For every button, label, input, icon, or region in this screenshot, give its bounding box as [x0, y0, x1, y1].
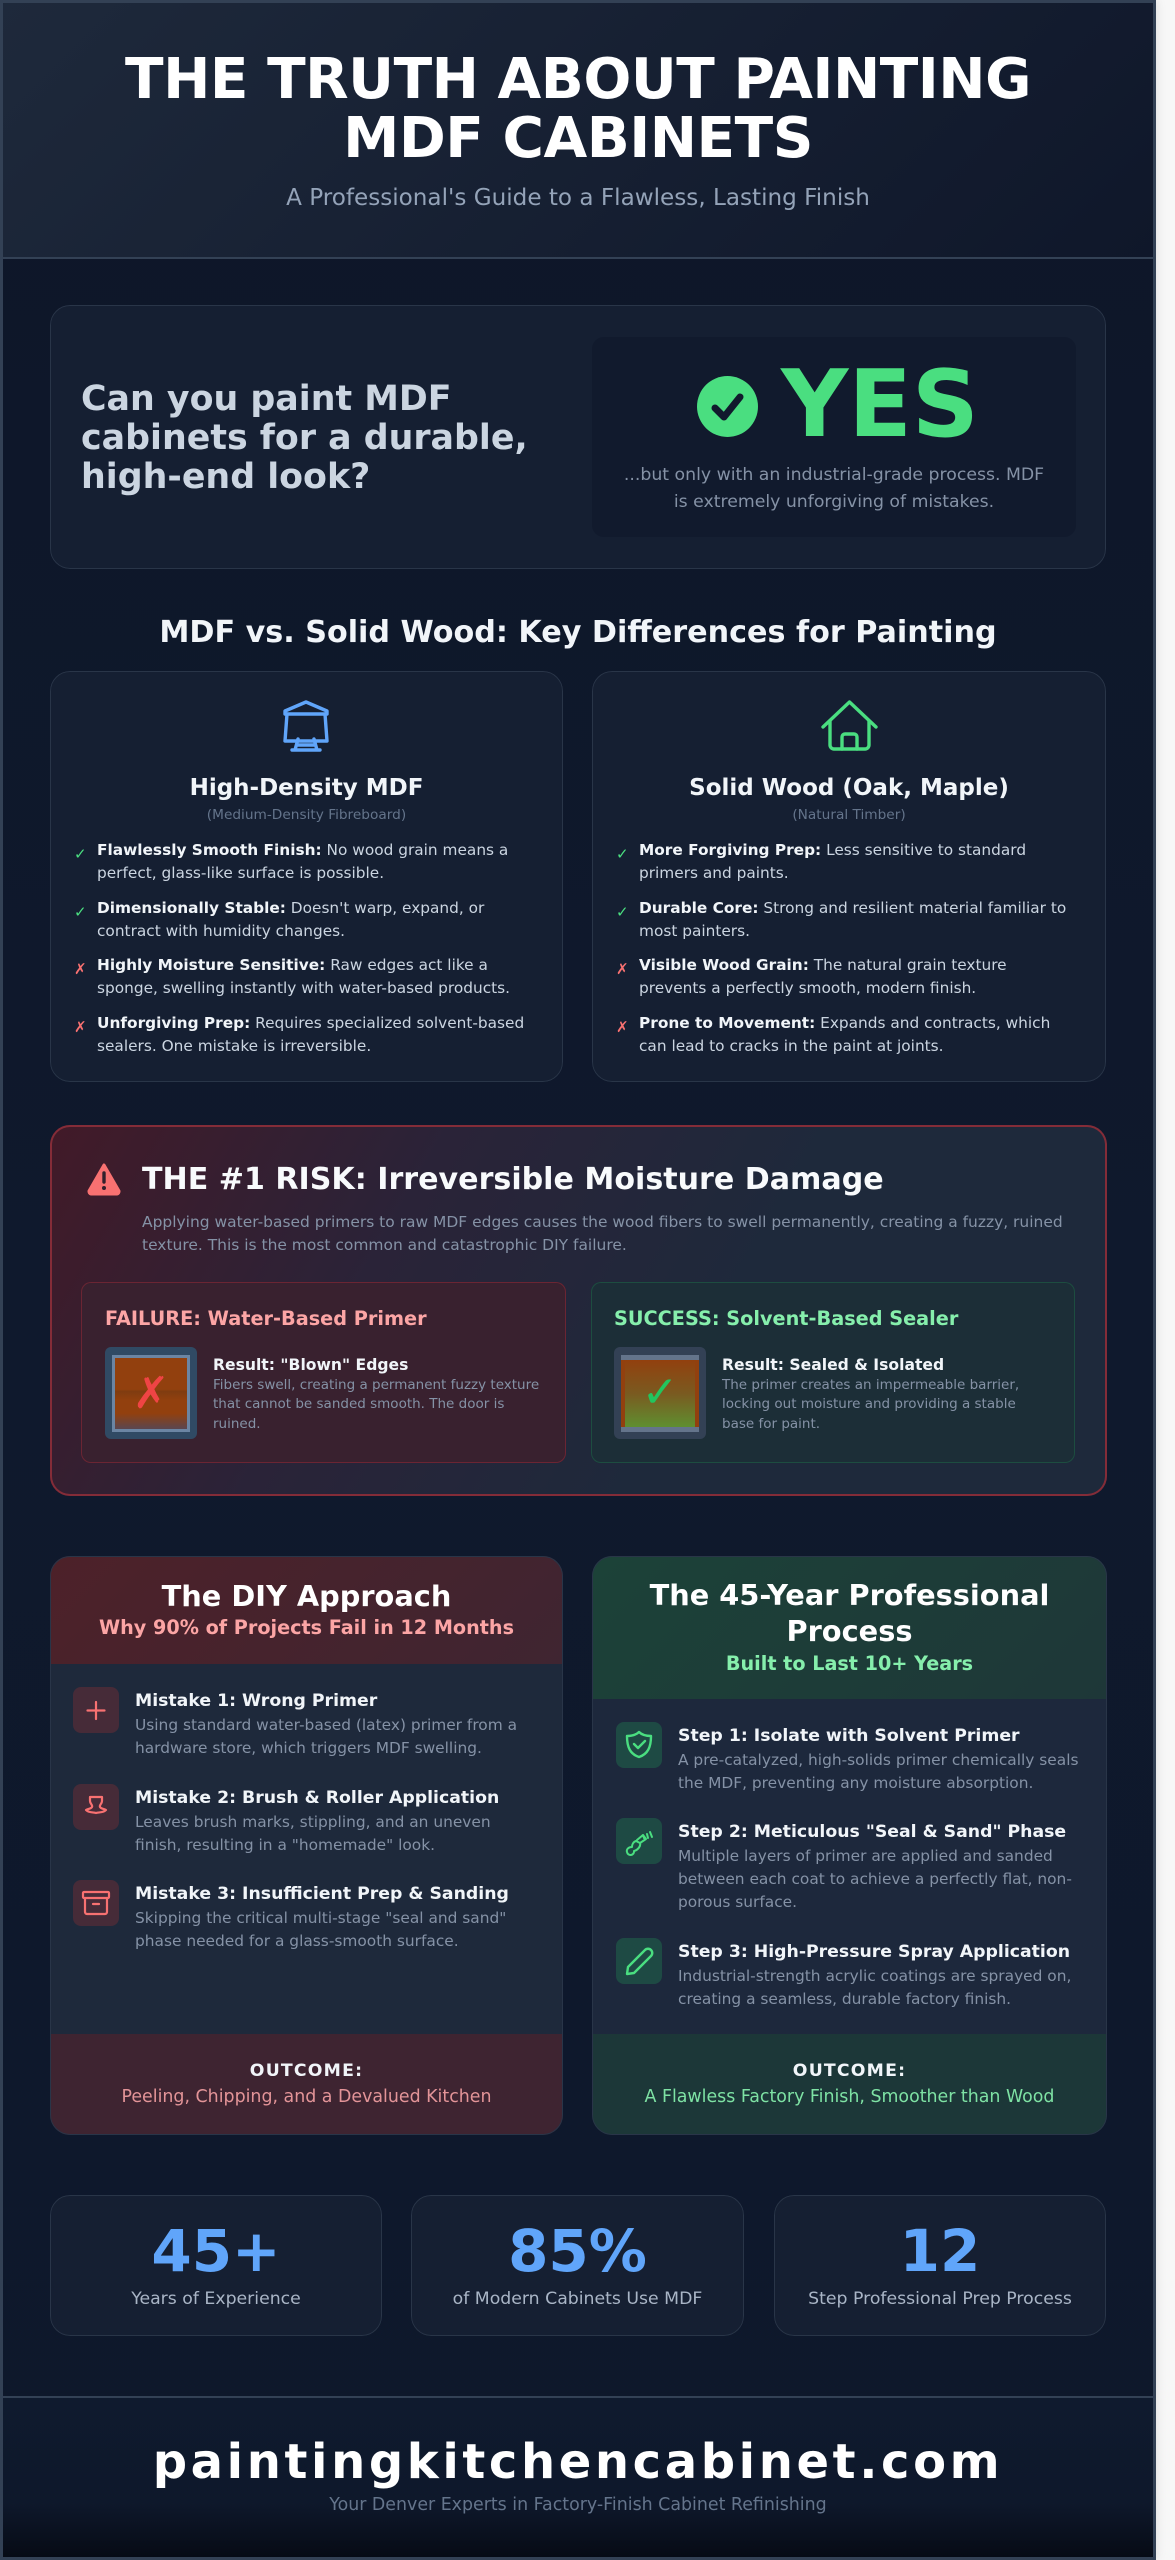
- icon: archive box: [73, 1880, 119, 1926]
- result description: base for paint.: [722, 1416, 820, 1432]
- list item: primers and paints.: [639, 864, 789, 882]
- stat number: 85%: [508, 2217, 647, 2285]
- pro title: [650, 1578, 1049, 1648]
- panel: question and answer: [50, 305, 1106, 569]
- list item: Flawlessly Smooth Finish: No wood grain means a: [97, 841, 508, 859]
- stat: years of experience: [50, 2195, 382, 2336]
- step text: A pre-catalyzed, high-solids primer chemically seals: [678, 1750, 1078, 1768]
- pro title: The 45-Year Professional: [650, 1578, 1049, 1612]
- result description: that cannot be sanded smooth. The door is: [213, 1396, 504, 1412]
- DIY title: The DIY Approach: [162, 1579, 451, 1613]
- stat label: Years of Experience: [131, 2289, 301, 2309]
- outcome text: Peeling, Chipping, and a Devalued Kitchen: [121, 2087, 492, 2107]
- website domain: paintingkitchencabinet.com: [153, 2434, 1003, 2490]
- answer caveat: [624, 465, 1044, 512]
- list item: ✗: [74, 1018, 87, 1036]
- header band: [0, 0, 1156, 259]
- stat label: of Modern Cabinets Use MDF: [453, 2289, 702, 2309]
- answer box: [592, 337, 1076, 537]
- mistake text: hardware store, which triggers MDF swelling.: [135, 1739, 482, 1757]
- risk description: Applying water-based primers to raw MDF edges causes the wood fibers to swell permanently, creating a fuzzy, ruined: [142, 1213, 1063, 1231]
- icon: failed door edge: [105, 1347, 197, 1439]
- stat: prep steps: [774, 2195, 1106, 2336]
- comparison heading: MDF vs. Solid Wood: Key Differences for Painting: [159, 614, 997, 650]
- list item: [616, 841, 1026, 882]
- tagline: Your Denver Experts in Factory-Finish Cabinet Refinishing: [329, 2494, 827, 2514]
- question text: Can you paint MDF: [81, 378, 452, 418]
- list item: ✗: [74, 960, 87, 978]
- list item: most painters.: [639, 922, 750, 940]
- stat number: 45+: [151, 2217, 281, 2285]
- mistake 3: [73, 1880, 509, 1950]
- panel: solid wood: [592, 671, 1106, 1082]
- list item: Dimensionally Stable: Doesn't warp, expand, or: [97, 899, 484, 917]
- footer: [0, 2396, 1156, 2560]
- mistake text: Using standard water-based (latex) primer from a: [135, 1716, 517, 1734]
- success heading: SUCCESS: Solvent-Based Sealer: [614, 1307, 958, 1330]
- step text: Step 3: High-Pressure Spray Application: [678, 1942, 1070, 1962]
- list item: Highly Moisture Sensitive: Raw edges act like a: [97, 956, 488, 974]
- panel: number one risk: [50, 1125, 1107, 1496]
- mistake text: phase needed for a glass-smooth surface.: [135, 1932, 459, 1950]
- sealed door swatch: [621, 1355, 699, 1432]
- card subtitle: (Natural Timber): [792, 806, 906, 822]
- list item: Visible Wood Grain: The natural grain texture: [639, 956, 1007, 974]
- subtitle: A Professional's Guide to a Flawless, Lasting Finish: [286, 184, 870, 210]
- mistake text: [135, 1690, 517, 1757]
- result description: [722, 1377, 1019, 1432]
- list item: Durable Core: Strong and resilient material familiar to: [639, 899, 1066, 917]
- pro outcome: [592, 2034, 1107, 2135]
- icon: anvil: [73, 1784, 119, 1830]
- list item: sealers. One mistake is irreversible.: [97, 1037, 371, 1055]
- icon: MDF board: [283, 700, 329, 752]
- icon: plus: [73, 1687, 119, 1733]
- step 1: [616, 1722, 1078, 1792]
- outcome label: OUTCOME:: [793, 2061, 906, 2081]
- question text: [81, 378, 528, 496]
- stat: modern cabinets: [411, 2195, 744, 2336]
- result description: ruined.: [213, 1416, 261, 1432]
- list item: [74, 899, 484, 940]
- failure result text: [213, 1356, 539, 1432]
- card title: Solid Wood (Oak, Maple): [689, 775, 1009, 801]
- step text: [678, 1726, 1078, 1792]
- step text: creating a seamless, durable factory finish.: [678, 1990, 1011, 2008]
- title: THE TRUTH ABOUT PAINTING: [125, 47, 1031, 112]
- list item: can lead to cracks in the paint at joints.: [639, 1037, 944, 1055]
- result description: locking out moisture and providing a stable: [722, 1396, 1016, 1412]
- list item: perfect, glass-like surface is possible.: [97, 864, 384, 882]
- icon: house: [821, 700, 878, 751]
- step text: the MDF, preventing any moisture absorption.: [678, 1774, 1033, 1792]
- list item: Unforgiving Prep: Requires specialized solvent-based: [97, 1014, 524, 1032]
- step text: Step 2: Meticulous "Seal & Sand" Phase: [678, 1822, 1066, 1842]
- icon: sanding tool: [616, 1818, 662, 1864]
- mistake text: Leaves brush marks, stippling, and an uneven: [135, 1812, 491, 1830]
- answer caveat: ...but only with an industrial-grade process. MDF: [624, 465, 1044, 485]
- list item: contract with humidity changes.: [97, 922, 345, 940]
- risk heading: THE #1 RISK: Irreversible Moisture Damage: [142, 1162, 884, 1197]
- list item: ✓: [74, 845, 87, 863]
- mistake text: [135, 1788, 499, 1854]
- pro title: Process: [786, 1614, 912, 1648]
- mistake 2: [73, 1784, 499, 1854]
- check mark: ✓: [642, 1367, 678, 1418]
- list item: prevents a perfectly smooth, modern finish.: [639, 979, 976, 997]
- step 2: [616, 1818, 1072, 1911]
- outcome text: A Flawless Factory Finish, Smoother than Wood: [645, 2087, 1054, 2107]
- risk description: texture. This is the most common and catastrophic DIY failure.: [142, 1236, 627, 1254]
- failure case: [81, 1282, 566, 1463]
- mistake text: Mistake 2: Brush & Roller Application: [135, 1788, 499, 1808]
- failure heading: FAILURE: Water-Based Primer: [105, 1307, 427, 1330]
- step text: Step 1: Isolate with Solvent Primer: [678, 1726, 1020, 1746]
- step text: porous surface.: [678, 1893, 797, 1911]
- icon: shield check: [616, 1722, 662, 1768]
- DIY outcome: [50, 2034, 563, 2135]
- question text: cabinets for a durable,: [81, 418, 528, 458]
- list item: ✗: [616, 1018, 629, 1036]
- pros and cons list: [616, 841, 1066, 1055]
- list item: [74, 1014, 524, 1055]
- list item: ✓: [74, 903, 87, 921]
- success case: [591, 1282, 1075, 1463]
- DIY subtitle: Why 90% of Projects Fail in 12 Months: [99, 1616, 514, 1639]
- result title: Result: "Blown" Edges: [213, 1356, 408, 1374]
- result description: Fibers swell, creating a permanent fuzzy texture: [213, 1377, 539, 1393]
- DIY header: [50, 1556, 563, 1664]
- title: [125, 47, 1031, 171]
- list item: Prone to Movement: Expands and contracts, which: [639, 1014, 1050, 1032]
- list item: ✓: [616, 845, 629, 863]
- icon: spray pencil: [616, 1938, 662, 1984]
- list item: [616, 1014, 1050, 1055]
- stat number: 12: [900, 2217, 980, 2285]
- answer caveat: is extremely unforgiving of mistakes.: [674, 492, 994, 512]
- step text: [678, 1942, 1071, 2008]
- step text: Multiple layers of primer are applied and sanded: [678, 1846, 1053, 1864]
- mistake text: Mistake 3: Insufficient Prep & Sanding: [135, 1884, 509, 1904]
- list item: More Forgiving Prep: Less sensitive to standard: [639, 841, 1026, 859]
- list item: [74, 841, 508, 882]
- card subtitle: (Medium-Density Fibreboard): [207, 806, 406, 822]
- stat label: Step Professional Prep Process: [808, 2289, 1072, 2309]
- pros and cons list: [74, 841, 524, 1055]
- outcome label: OUTCOME:: [250, 2061, 363, 2081]
- result description: [213, 1377, 539, 1432]
- risk description: [142, 1213, 1063, 1254]
- list item: [616, 956, 1007, 997]
- list item: [74, 956, 510, 997]
- step 3: [616, 1938, 1071, 2008]
- X mark: ✗: [133, 1368, 169, 1419]
- result title: Result: Sealed & Isolated: [722, 1356, 944, 1374]
- list item: [616, 899, 1066, 940]
- panel: high-density MDF: [50, 671, 563, 1082]
- mistake 1: [73, 1687, 517, 1757]
- step text: between each coat to achieve a perfectly flat, non-: [678, 1870, 1072, 1888]
- pro subtitle: Built to Last 10+ Years: [726, 1652, 973, 1675]
- panel: professional process: [592, 1556, 1107, 2135]
- title: MDF CABINETS: [343, 106, 813, 171]
- list item: ✗: [616, 960, 629, 978]
- pro header: [592, 1556, 1107, 1699]
- question text: high-end look?: [81, 456, 370, 496]
- step text: [678, 1822, 1072, 1911]
- mistake text: finish, resulting in a "homemade" look.: [135, 1836, 435, 1854]
- sealer gradient: [625, 1360, 695, 1427]
- damaged door swatch: [112, 1355, 190, 1432]
- step text: Industrial-strength acrylic coatings are sprayed on,: [678, 1966, 1071, 1984]
- mistake text: Skipping the critical multi-stage "seal and sand": [135, 1908, 506, 1926]
- mistake text: Mistake 1: Wrong Primer: [135, 1690, 377, 1710]
- list item: ✓: [616, 903, 629, 921]
- mistake text: [135, 1884, 509, 1950]
- success result text: [722, 1356, 1019, 1432]
- panel: DIY approach: [50, 1556, 563, 2135]
- result description: The primer creates an impermeable barrier,: [722, 1377, 1019, 1393]
- card title: High-Density MDF: [190, 775, 423, 801]
- icon: check circle: [697, 376, 758, 437]
- icon: warning triangle: [88, 1163, 120, 1196]
- icon: sealed door edge: [614, 1347, 706, 1439]
- YES label: YES: [781, 350, 979, 458]
- list item: sponge, swelling instantly with water-based products.: [97, 979, 510, 997]
